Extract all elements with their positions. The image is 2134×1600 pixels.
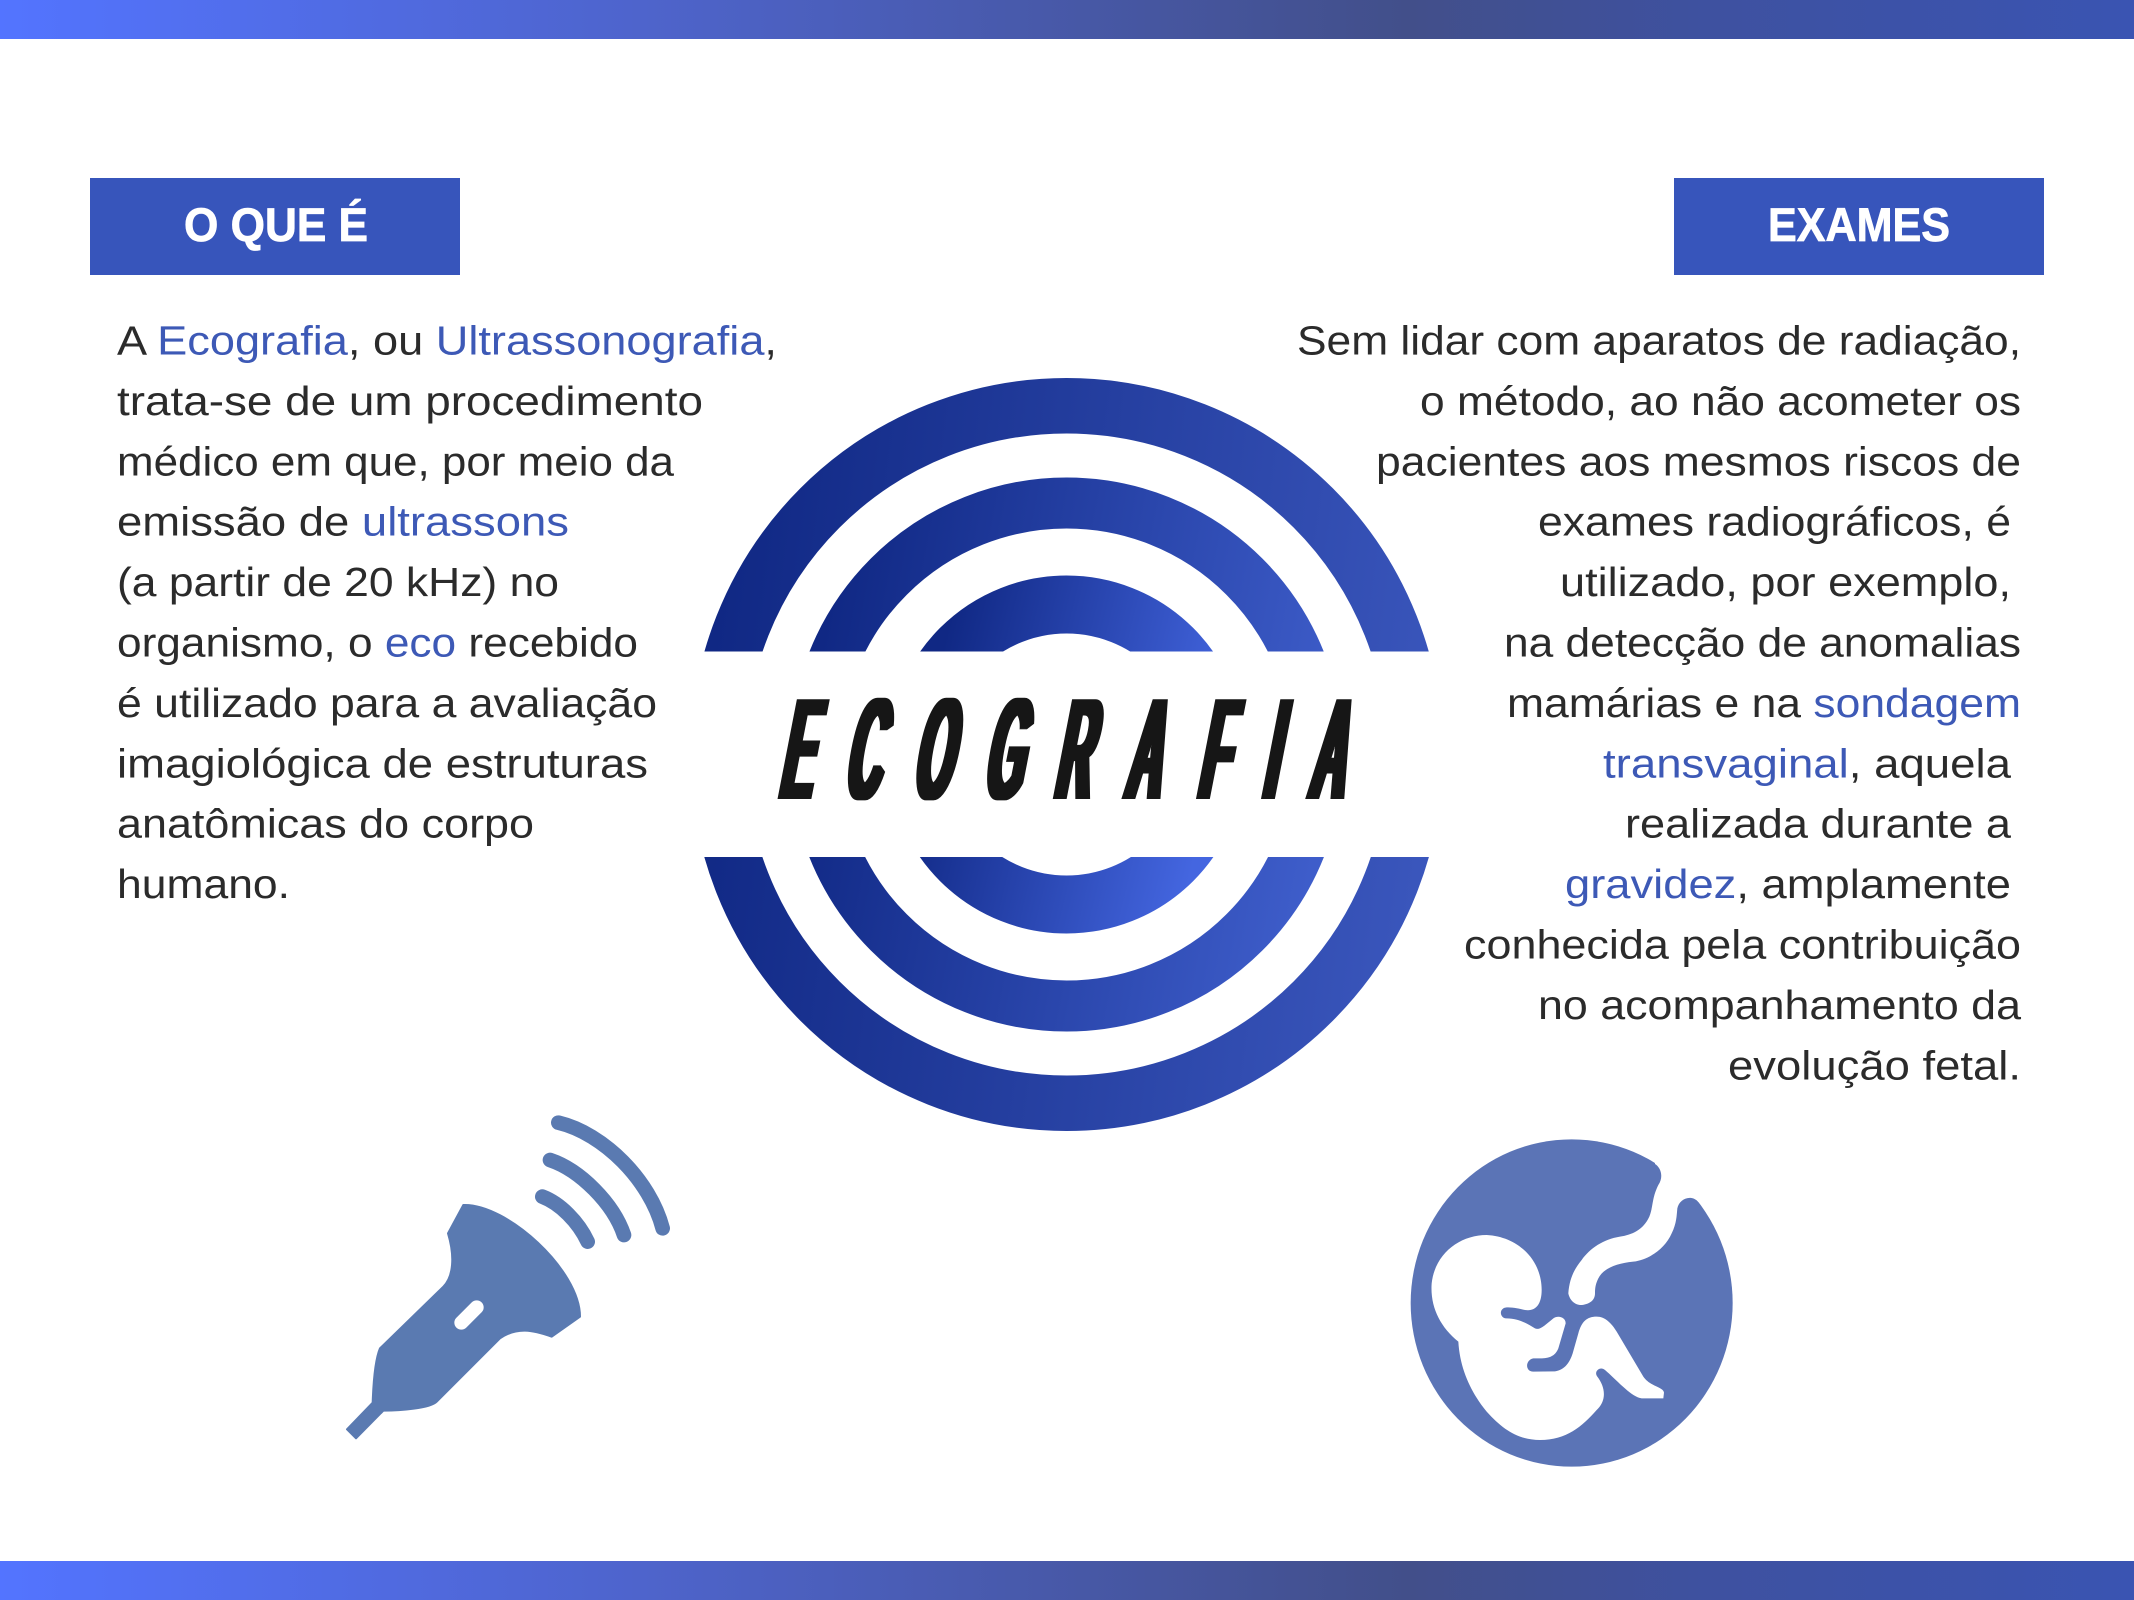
text block: o que é: organismo, o eco recebido	[117, 620, 638, 666]
text block: exames: realizada durante a	[1625, 801, 2011, 847]
text block: exames: Sem lidar com aparatos de radiação,	[1297, 318, 2021, 364]
top gradient bar	[0, 0, 2134, 39]
text block: o que é: anatômicas do corpo	[117, 801, 534, 847]
icon: ultrasound probe	[347, 1123, 663, 1438]
text block: o que é: A Ecografia , ou Ultrassonografia ,	[117, 318, 777, 364]
text block: exames: conhecida pela contribuição	[1464, 922, 2021, 968]
text block: o que é	[117, 318, 777, 907]
text block: exames: exames radiográficos, é	[1538, 499, 2011, 545]
concentric sound-wave rings	[718, 406, 1415, 1103]
central emblem: concentric rings with title	[718, 406, 1415, 1103]
text block: o que é: (a partir de 20 kHz) no	[117, 559, 559, 605]
text block: o que é: médico em que, por meio da	[117, 438, 674, 484]
text block: exames: transvaginal , aquela	[1603, 740, 2011, 786]
text block: exames: mamárias e na sondagem	[1507, 680, 2021, 726]
text block: o que é: imagiológica de estruturas	[117, 740, 648, 786]
heading: Exames	[1674, 178, 2044, 275]
text block: o que é: é utilizado para a avaliação	[117, 680, 657, 726]
heading: O que é: O QUE É	[184, 198, 368, 251]
icon: fetus in circle	[1411, 1137, 1743, 1467]
text block: exames	[1297, 318, 2021, 1088]
text block: exames: utilizado, por exemplo,	[1560, 559, 2011, 605]
text block: exames: no acompanhamento da	[1538, 982, 2021, 1028]
text block: o que é: trata-se de um procedimento	[117, 378, 703, 424]
text block: exames: o método, ao não acometer os	[1420, 378, 2021, 424]
bottom gradient bar	[0, 1561, 2134, 1600]
text block: o que é: emissão de ultrassons	[117, 499, 569, 545]
heading: Exames: EXAMES	[1768, 198, 1950, 251]
heading: O que é	[90, 178, 460, 275]
text block: exames: gravidez , amplamente	[1565, 861, 2011, 907]
text block: exames: na detecção de anomalias	[1504, 620, 2021, 666]
text block: o que é: humano.	[117, 861, 290, 907]
title: Ecografia: ECOGRAFIA	[772, 670, 1367, 831]
text block: exames: pacientes aos mesmos riscos de	[1376, 438, 2021, 484]
text block: exames: evolução fetal.	[1728, 1042, 2021, 1088]
